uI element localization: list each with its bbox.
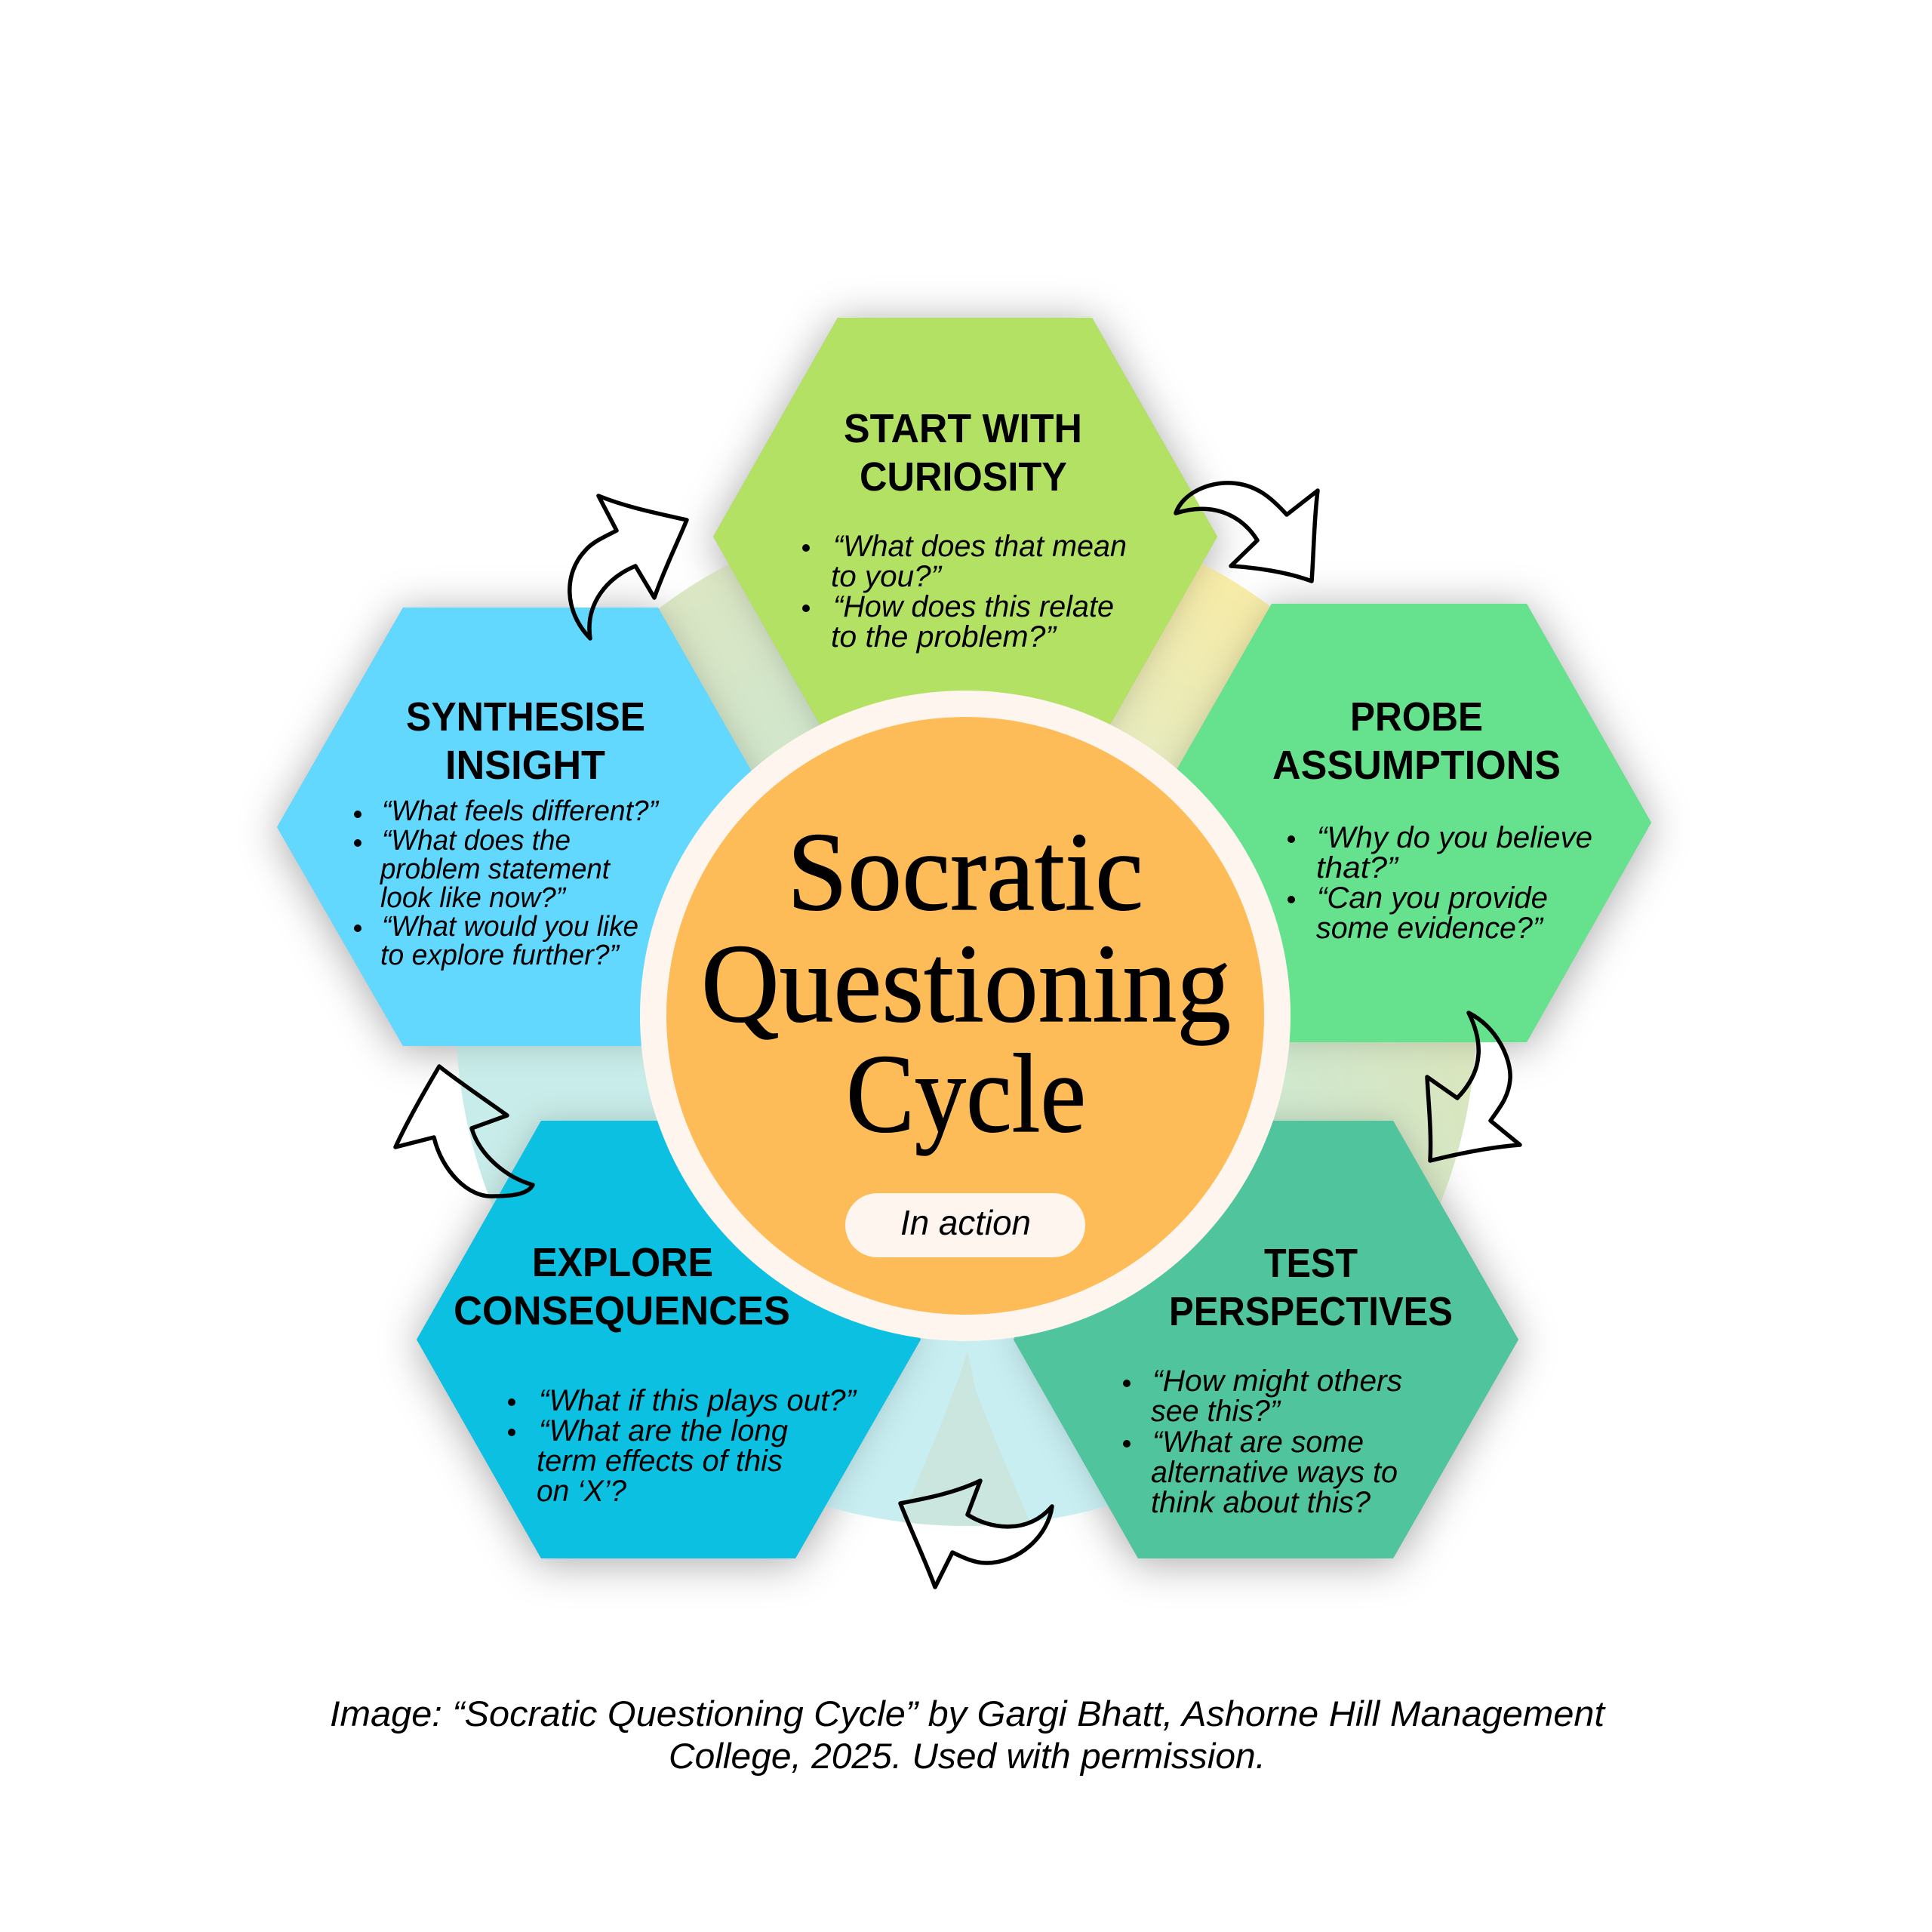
heading: synthesise insight: SYNTHESISE [406, 694, 645, 740]
heading: synthesise insight: INSIGHT [445, 743, 605, 788]
caption [330, 1694, 1606, 1776]
arrow: probe to test [1427, 1013, 1520, 1161]
heading: synthesise insight [406, 694, 645, 788]
questions: synthesise insight: look like now?” [380, 882, 567, 914]
panel: probe assumptions [1146, 604, 1651, 1042]
hexagon drop shadows [277, 318, 1651, 1558]
questions: test perspectives: think about this? [1151, 1486, 1371, 1519]
questions: explore consequences [508, 1384, 857, 1508]
questions: synthesise insight: “What does the [382, 825, 571, 857]
title [701, 810, 1231, 1156]
questions: test perspectives: “How might others [1152, 1364, 1402, 1398]
questions: start with curiosity: to the problem?” [831, 620, 1057, 654]
questions: test perspectives: alternative ways to [1151, 1456, 1398, 1489]
questions: explore consequences: “What are the long [539, 1414, 788, 1447]
questions: probe assumptions [1287, 821, 1592, 945]
background ring connecting the hexagons [457, 563, 1475, 1526]
arrow: synthesise to start [570, 496, 687, 638]
pill: in action [845, 1193, 1085, 1257]
questions: probe assumptions: “Can you provide [1317, 881, 1548, 915]
panel: test perspectives [1014, 1121, 1518, 1558]
questions: explore consequences: term effects of this [537, 1444, 783, 1478]
questions: explore consequences: on ‘X’? [537, 1475, 627, 1508]
questions: synthesise insight [354, 795, 660, 971]
arrow: test to explore [900, 1481, 1052, 1587]
panel: start with curiosity [713, 318, 1217, 756]
caption: Image: “Socratic Questioning Cycle” by Gargi Bhatt, Ashorne Hill Management [330, 1694, 1606, 1734]
questions: test perspectives: see this?” [1151, 1395, 1281, 1428]
centre circle [640, 691, 1291, 1341]
panel: synthesise insight [277, 608, 783, 1046]
questions: synthesise insight: problem statement [380, 854, 611, 885]
heading: explore consequences: EXPLORE [532, 1240, 713, 1285]
questions: start with curiosity [802, 530, 1127, 654]
questions: synthesise insight: “What would you like [382, 911, 638, 943]
questions: start with curiosity: to you?” [831, 560, 943, 593]
questions: synthesise insight: “What feels different?” [382, 795, 660, 827]
arrow backgrounds [395, 481, 1521, 1589]
arrow: start to probe [1176, 483, 1318, 581]
heading: explore consequences: CONSEQUENCES [454, 1288, 790, 1334]
heading: start with curiosity [844, 406, 1082, 500]
heading: probe assumptions: ASSUMPTIONS [1272, 743, 1561, 788]
heading: test perspectives: PERSPECTIVES [1169, 1289, 1453, 1334]
title: Questioning [701, 921, 1231, 1046]
heading: test perspectives: TEST [1264, 1241, 1358, 1286]
heading: test perspectives [1169, 1241, 1453, 1334]
questions: test perspectives [1123, 1364, 1402, 1519]
heading: start with curiosity: START WITH [844, 406, 1082, 451]
questions: synthesise insight: to explore further?” [380, 940, 620, 971]
heading: explore consequences [454, 1240, 790, 1334]
questions: explore consequences: “What if this plays out?” [539, 1384, 857, 1417]
questions: probe assumptions: “Why do you believe [1317, 821, 1592, 854]
caption: College, 2025. Used with permission. [669, 1736, 1266, 1776]
questions: start with curiosity: “How does this relate [833, 590, 1114, 623]
heading: probe assumptions [1272, 694, 1561, 788]
title: Socratic [787, 810, 1143, 934]
heading: start with curiosity: CURIOSITY [860, 454, 1067, 500]
title: Cycle [846, 1032, 1086, 1156]
arrow: explore to synthesise [395, 1066, 533, 1196]
questions: probe assumptions: some evidence?” [1316, 912, 1544, 945]
heading: probe assumptions: PROBE [1350, 694, 1483, 740]
pill: in action: In action [900, 1203, 1031, 1242]
questions: start with curiosity: “What does that mean [833, 530, 1127, 563]
questions: test perspectives: “What are some [1152, 1426, 1364, 1459]
questions: probe assumptions: that?” [1316, 851, 1399, 884]
panel: explore consequences [417, 1121, 921, 1558]
